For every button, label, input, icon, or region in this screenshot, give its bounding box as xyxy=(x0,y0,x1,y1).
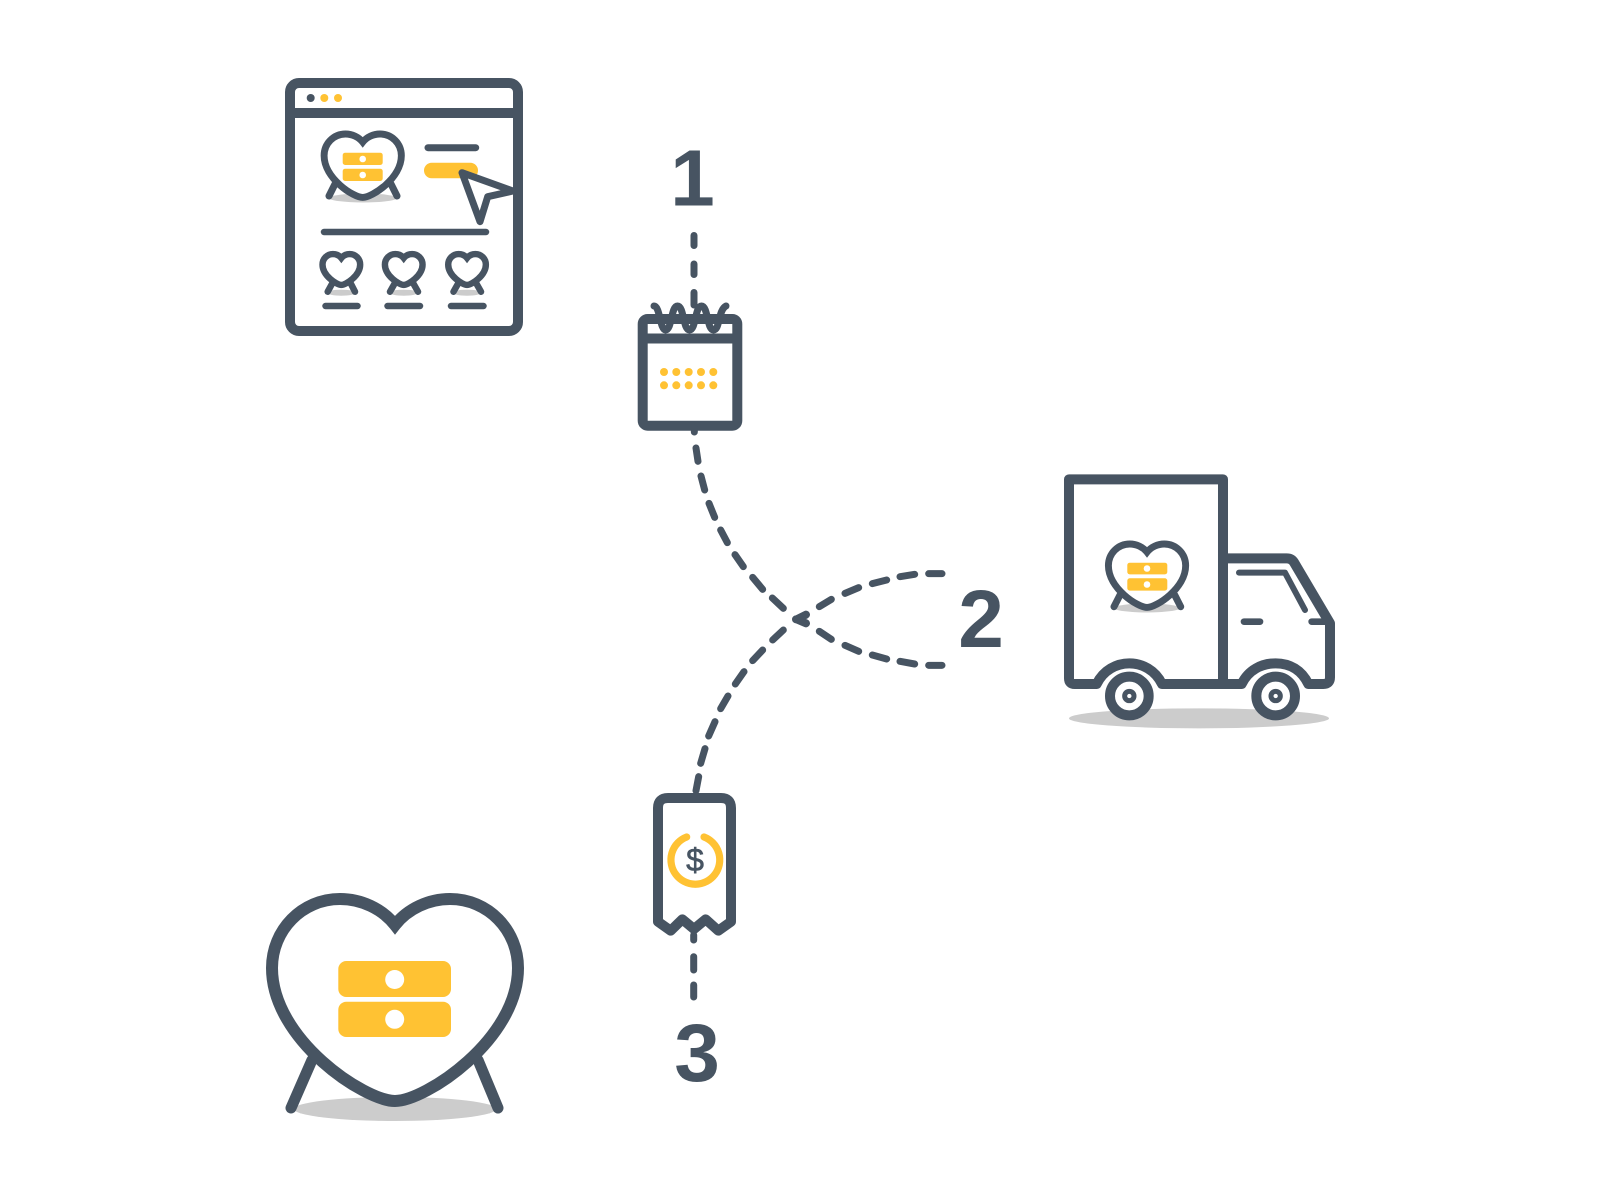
calendar date dots xyxy=(660,368,717,389)
buy button xyxy=(424,163,478,178)
dashed curve down from 2 xyxy=(819,631,942,665)
icon: calendar xyxy=(638,306,742,426)
dollar sign: $ xyxy=(686,842,704,878)
dashed curve from calendar to centre xyxy=(694,428,783,608)
browser dots xyxy=(307,94,342,102)
truck heart logo xyxy=(1108,544,1186,612)
shadow xyxy=(294,1097,496,1121)
icon: receipt with dollar xyxy=(658,798,731,931)
bottom drawer xyxy=(338,1002,451,1037)
product heart chest xyxy=(324,134,401,202)
step number 2: 2 xyxy=(958,574,1004,665)
step number 1: 1 xyxy=(670,134,715,223)
browser frame xyxy=(290,83,518,331)
truck ground shadow xyxy=(1069,708,1329,728)
arrow head at crossing xyxy=(796,615,806,623)
dashed line from 1 to calendar xyxy=(690,236,698,305)
browser header bar xyxy=(285,108,523,118)
calendar frame xyxy=(643,319,737,426)
door handle xyxy=(1244,612,1326,632)
dashed curve to receipt xyxy=(696,630,783,791)
chest legs xyxy=(291,1060,498,1108)
truck window xyxy=(1239,573,1305,610)
large heart chest xyxy=(272,899,518,1121)
step number 3: 3 xyxy=(674,1008,720,1099)
small product 3 xyxy=(448,254,486,306)
small product 2 xyxy=(385,254,423,306)
calendar header line xyxy=(638,334,742,344)
small product 1 xyxy=(323,254,360,306)
rear wheel xyxy=(1110,677,1149,715)
heart outline xyxy=(272,899,518,1101)
front wheel xyxy=(1256,677,1295,715)
browser window icon xyxy=(285,83,523,331)
product title line xyxy=(428,144,476,151)
calendar spiral binding xyxy=(654,306,726,330)
top drawer xyxy=(338,961,451,997)
icon: delivery truck xyxy=(1069,479,1330,728)
dashed line from receipt to 3 xyxy=(690,935,697,997)
icon: cursor arrow xyxy=(462,173,513,222)
receipt outline xyxy=(658,798,731,931)
truck body outline xyxy=(1069,479,1330,684)
divider line xyxy=(324,229,486,235)
dollar ring xyxy=(671,837,720,884)
dashed route through step 2 xyxy=(694,428,942,791)
dashed curve up to 2 xyxy=(819,574,942,607)
